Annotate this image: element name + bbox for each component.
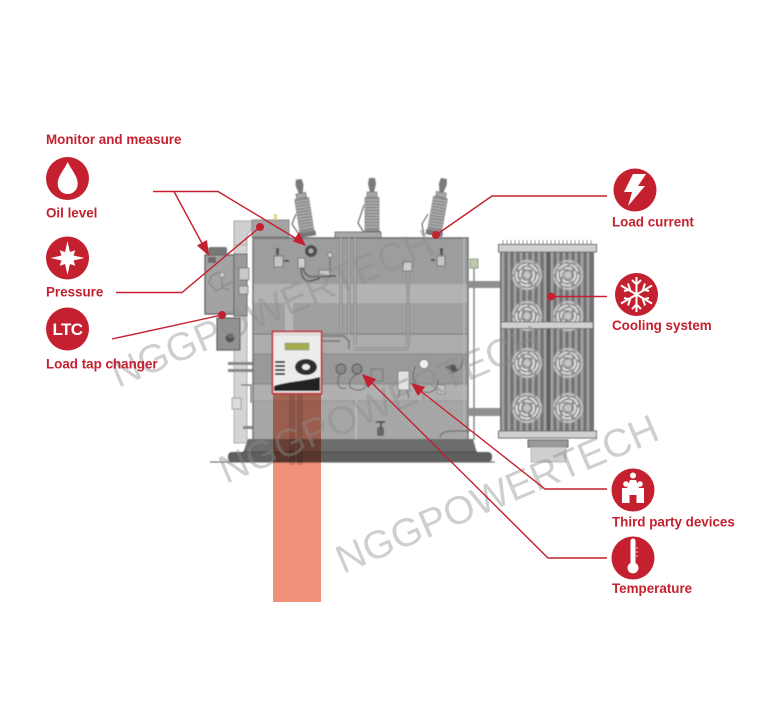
left column and conservator pipe: [228, 214, 289, 443]
relay device panel: [272, 332, 322, 394]
label: load tap changer: Load tap changer: [46, 356, 158, 372]
watermark text: NGGPOWERTECH: [104, 221, 440, 396]
transformer illustration: [205, 177, 596, 462]
watermark text: NGGPOWERTECH: [212, 317, 548, 492]
salmon highlight column: [273, 394, 321, 602]
icon: oil level: [46, 157, 89, 200]
pressure line: [116, 223, 264, 292]
icon: pressure: [46, 236, 89, 280]
bushing: right: [425, 177, 452, 237]
tank pipes: [322, 238, 408, 349]
label: load current: Load current: [612, 214, 694, 230]
label: pressure: Pressure: [46, 284, 103, 300]
watermark text: NGGPOWERTECH: [329, 407, 665, 582]
tank body: [253, 238, 468, 440]
watermark text: [104, 221, 665, 582]
manifold: [335, 232, 381, 239]
ground line: [210, 461, 495, 463]
load current line: [432, 196, 607, 239]
side pipe to radiator: [468, 259, 500, 440]
load tap changer cabinet: [205, 247, 249, 350]
radiator bank: [498, 240, 596, 462]
monitor line with two arrows: [153, 192, 306, 256]
fans: [511, 259, 584, 424]
icon: third party devices: [612, 468, 654, 512]
icon: temperature: [612, 536, 654, 580]
label: temperature: Temperature: [612, 581, 692, 596]
load tap changer line: [112, 311, 226, 339]
icon: load tap changer: LTC: [53, 320, 83, 339]
callout lines: [112, 192, 607, 558]
label: oil level: Oil level: [46, 206, 97, 220]
drain valve: [376, 421, 385, 436]
icon: load current: [614, 168, 656, 212]
third party devices line: [411, 383, 607, 489]
heading: monitor and measure: Monitor and measure: [46, 132, 181, 147]
tank fittings: [274, 245, 445, 281]
label: cooling system: Cooling system: [612, 318, 712, 333]
icon: cooling system: [615, 273, 658, 316]
cooling system line: [547, 292, 607, 300]
tank base: [228, 431, 492, 462]
bushing: centre: [364, 178, 380, 236]
temperature line: [362, 374, 607, 558]
lower gauges and devices: [336, 358, 463, 398]
bushing: left: [290, 178, 316, 238]
label: third party devices: Third party devices: [612, 514, 735, 530]
icon: load tap changer: [46, 308, 89, 350]
